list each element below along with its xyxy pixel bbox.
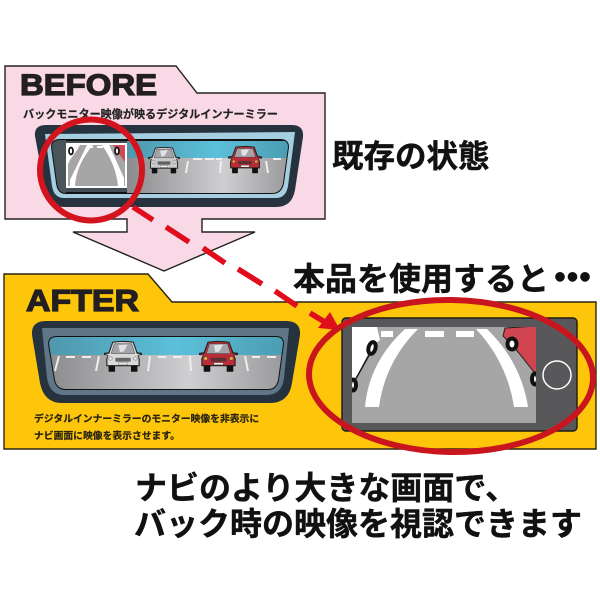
heading: existing state: 既存の状態 — [332, 138, 490, 174]
car: silver — [104, 341, 142, 372]
mirror: after — [32, 321, 300, 403]
text: before caption: バックモニター映像が映るデジタルインナーミラー — [23, 107, 278, 121]
text: conclusion: ナビのより大きな画面で、 — [135, 470, 517, 506]
panel: before — [5, 66, 325, 271]
home button — [543, 361, 571, 389]
text: conclusion — [134, 470, 582, 542]
car: red — [228, 146, 262, 173]
heading: AFTER: AFTER — [26, 283, 139, 318]
heading: BEFORE: BEFORE — [20, 69, 157, 102]
red ellipse highlight — [308, 298, 594, 454]
text: conclusion: バック時の映像を視認できます — [134, 506, 582, 542]
dashed arrow — [133, 207, 340, 330]
heading: when using this product: ・・・ — [543, 260, 590, 298]
text: after caption: ナビ画面に映像を表示させます。 — [34, 429, 180, 442]
mirror: before — [35, 125, 303, 207]
text: after caption: デジタルインナーミラーのモニター映像を非表示に — [34, 412, 259, 425]
infographic — [3, 65, 597, 539]
lane markings — [365, 329, 528, 407]
phone navigation screen — [342, 318, 577, 431]
camera view: red car — [503, 326, 538, 384]
heading: when using this product: 本品を使用すると — [293, 261, 549, 297]
car: silver — [148, 147, 180, 173]
text: after caption — [34, 412, 259, 442]
camera view: white car — [350, 327, 380, 390]
panel: after — [4, 274, 596, 449]
red circle highlight — [40, 120, 142, 220]
car: red — [199, 341, 238, 372]
mirror inset: rear camera view — [66, 143, 127, 188]
